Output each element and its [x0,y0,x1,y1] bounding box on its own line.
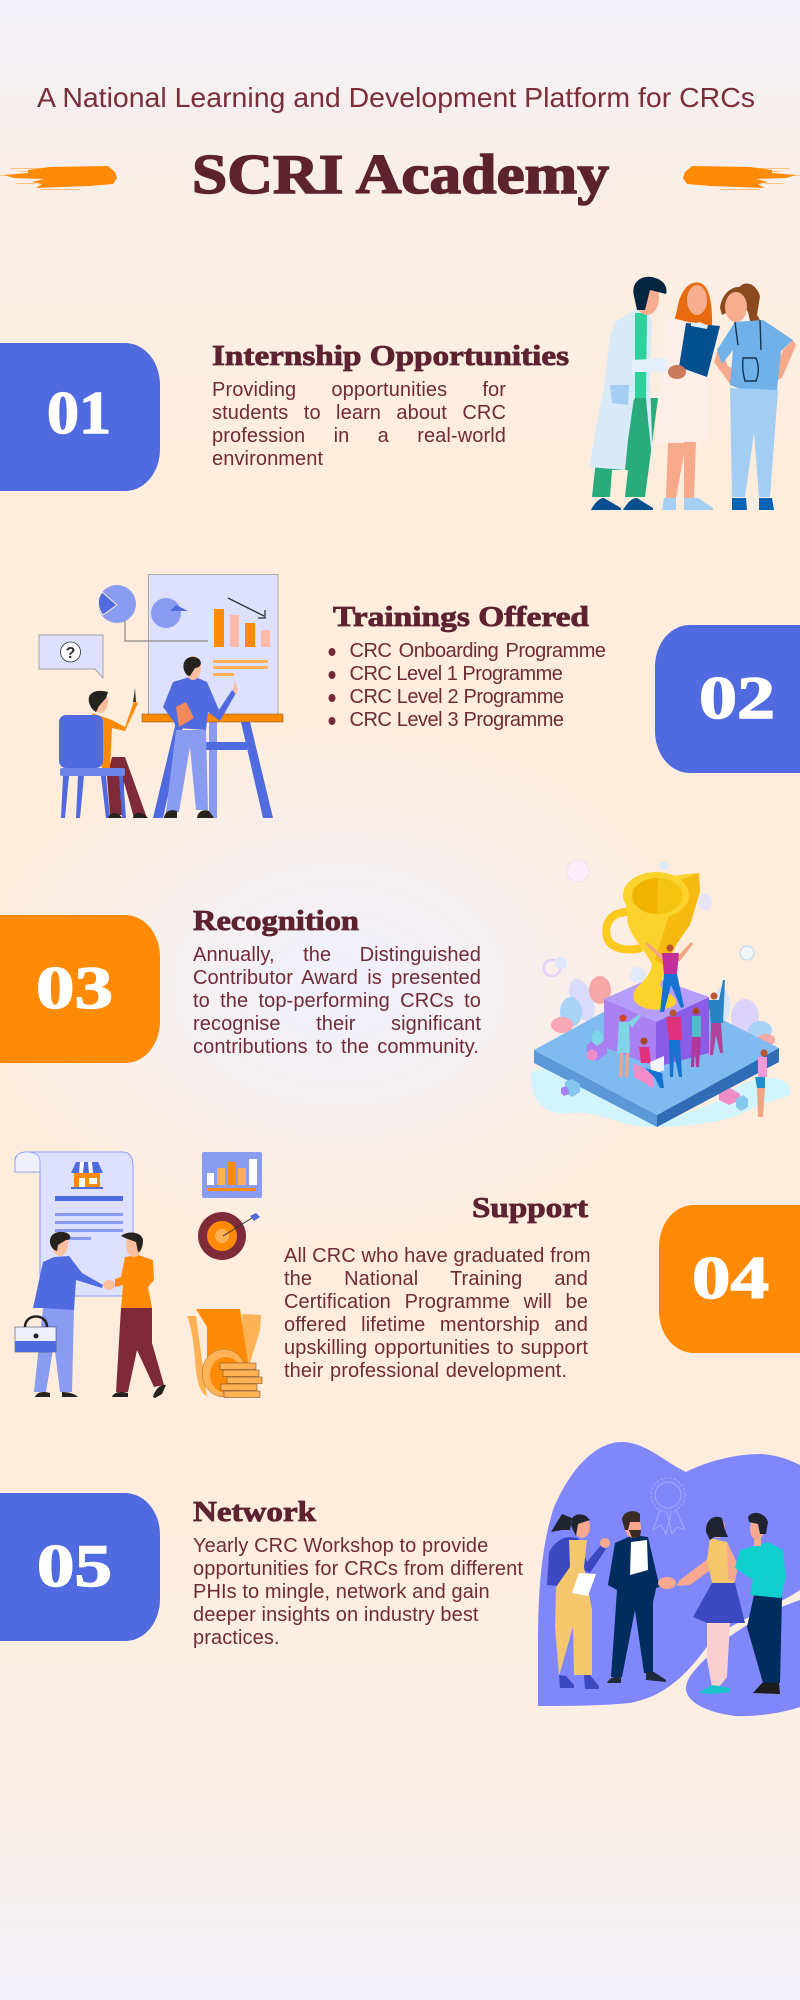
man in blue [710,992,718,1000]
number badge 01 [0,343,160,491]
body text: support [284,1245,591,1382]
body text: support: offered lifetime mentorship and [284,1314,588,1336]
icon: pie chart two [151,598,188,628]
background blob [538,1442,800,1706]
body text: support: their professional development. [284,1360,567,1382]
body text: network: deeper insights on industry best [193,1604,479,1626]
text lines [213,660,268,676]
list: trainings: CRC Level 3 Programme [350,709,564,731]
body text: support: Certification Programme will be [284,1291,588,1313]
woman with paper [547,1514,610,1689]
floor blob [531,1069,791,1127]
number badge 05 [0,1493,160,1641]
illustration: networking people [538,1442,800,1716]
background blob lower [686,1600,800,1716]
right nurse [714,283,796,510]
icon: right brush stroke [683,166,800,190]
platform [534,985,779,1127]
purple block [604,977,709,1067]
list: trainings: CRC Level 2 Programme [350,686,564,708]
bar chart [214,609,270,647]
presentation board [148,574,278,714]
body text: support: All CRC who have graduated from [284,1245,591,1267]
heading: internship opportunities: Internship Opportunities [212,341,569,372]
icon: medal outline [651,1478,685,1534]
list: trainings [350,640,606,731]
number badge 05: 05 [37,1533,112,1599]
body text: internship: profession in a real-world [212,425,506,447]
icon: bar chart card [202,1152,262,1198]
woman in purple [692,1008,700,1014]
document scroll [15,1152,133,1296]
seated colleague [59,688,148,818]
body text: internship: Providing opportunities for [212,379,506,401]
number badge 04 [659,1205,800,1353]
icon: target [198,1212,260,1260]
presenter [163,656,238,818]
body text: internship: environment [212,448,323,470]
title: SCRI Academy [192,144,609,206]
body text: recognition: Annually, the Distinguished [193,944,481,966]
businessman right [103,1233,166,1398]
number badge 03: 03 [36,955,113,1021]
body text: support: the National Training and [284,1268,588,1290]
body text: network [193,1535,523,1649]
arrow [228,598,265,618]
businessman left [15,1232,103,1397]
illustration: trophy and team on platform [531,860,791,1127]
body text: network: PHIs to mingle, network and gain [193,1581,490,1603]
body text: internship: students to learn about CRC [212,402,506,424]
number badge 01: 01 [47,380,111,446]
document lines [55,1196,123,1201]
number badge 02 [655,625,800,773]
body text: support: upskilling opportunities to support [284,1337,588,1359]
illustration: handshake and business icons [15,1152,262,1398]
heading: network: Network [193,1497,316,1528]
icon: store [71,1162,103,1189]
question bubble: ? [66,645,75,662]
list: trainings: CRC Level 1 Programme [350,663,562,685]
icon: money and coins [187,1309,262,1398]
cubes [561,1030,748,1111]
body text: internship [212,379,506,470]
body text: recognition: recognise their significant [193,1013,481,1035]
connector line [125,620,208,641]
heading: trainings offered: Trainings Offered [333,602,590,633]
man in teal sweater [735,1513,786,1694]
list: trainings: CRC Onboarding Programme [350,640,606,662]
heading: recognition: Recognition [193,906,359,937]
woman in teal dress [617,1014,641,1053]
woman in skirt [676,1517,745,1694]
easel [142,714,283,818]
number badge 04: 04 [692,1245,769,1311]
body text: recognition [193,944,481,1058]
bubbles [544,860,754,983]
body text: network: opportunities for CRCs from different [193,1558,523,1580]
man in suit [607,1511,676,1683]
illustration: medical team [589,277,796,510]
man with pink shirt [670,1010,676,1016]
number badge 02: 02 [699,665,775,731]
question bubble [39,635,103,678]
icon: left brush stroke [0,166,117,190]
team members [617,980,768,1117]
scroll curl [15,1152,40,1172]
icon: trophy [606,872,700,1010]
illustration: training presentation [39,574,283,818]
middle nurse [656,282,720,510]
seated woman [640,1038,648,1044]
body text: network: Yearly CRC Workshop to provide [193,1535,488,1557]
body text: recognition: contributions to the community. [193,1036,479,1058]
cheering figure on top [645,942,693,1012]
body text: recognition: to the top-performing CRCs to [193,990,481,1012]
bullet markers [328,648,336,725]
body text: recognition: Contributor Award is presented [193,967,481,989]
photographer [760,1050,768,1056]
doctor [589,277,686,510]
subtitle: A National Learning and Development Platform for CRCs [37,82,755,113]
foliage [551,976,775,1046]
heading: support: Support [472,1193,589,1224]
body text: network: practices. [193,1627,280,1649]
icon: pie chart one [98,585,136,623]
number badge 03 [0,915,160,1063]
